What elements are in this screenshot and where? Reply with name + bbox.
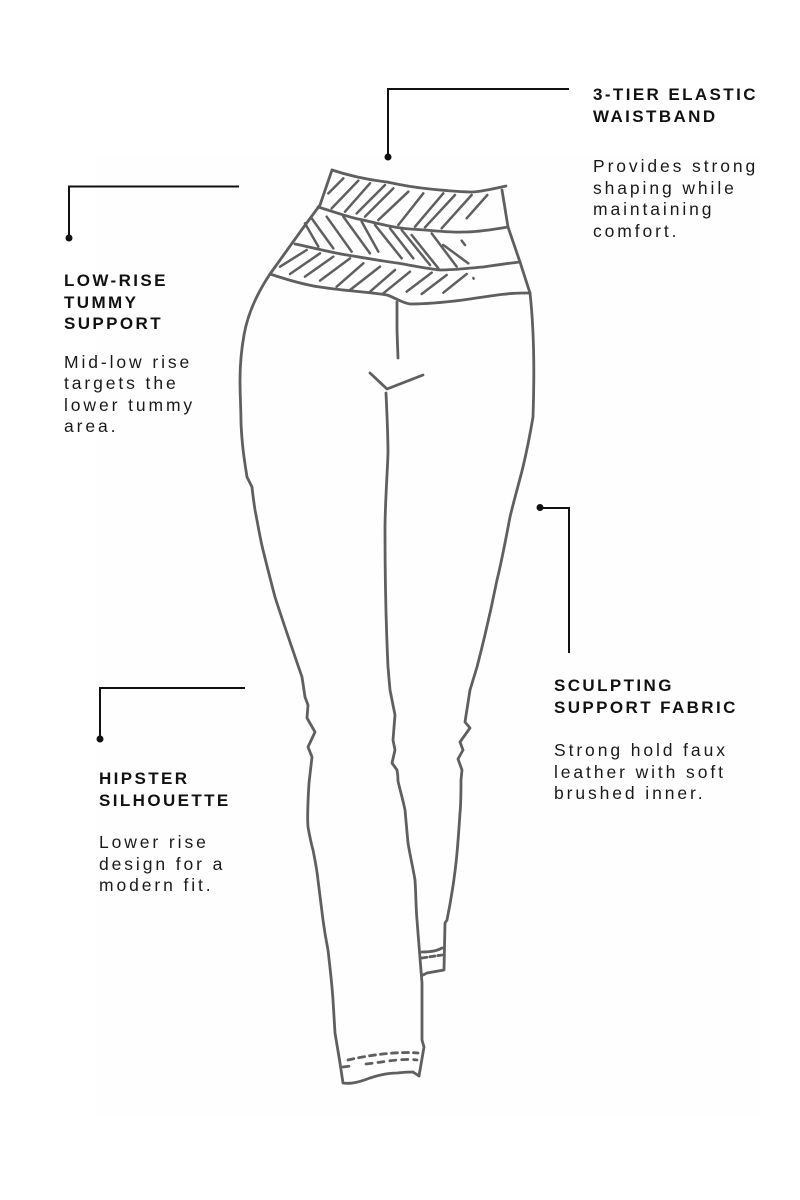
description: leather with soft bbox=[554, 762, 726, 782]
heading bbox=[593, 85, 758, 126]
heading bbox=[99, 769, 231, 810]
description: comfort. bbox=[593, 220, 679, 240]
callout text: hipster silhouette bbox=[99, 769, 231, 895]
back leg cuff stitching bbox=[422, 948, 442, 958]
heading: TUMMY bbox=[64, 292, 138, 312]
heading: SILHOUETTE bbox=[99, 790, 231, 810]
left outer leg bbox=[240, 274, 419, 1083]
heading: 3-TIER ELASTIC bbox=[593, 85, 758, 104]
description: area. bbox=[64, 416, 118, 436]
heading bbox=[64, 271, 168, 333]
description: Provides strong bbox=[593, 156, 758, 176]
description: modern fit. bbox=[99, 875, 214, 895]
description: Mid-low rise bbox=[64, 352, 192, 372]
description: Lower rise bbox=[99, 832, 209, 852]
waistband hatching bbox=[280, 178, 487, 294]
description: targets the bbox=[64, 373, 179, 393]
description bbox=[554, 740, 728, 803]
description: brushed inner. bbox=[554, 783, 706, 803]
heading: HIPSTER bbox=[99, 769, 189, 788]
callout text: low-rise tummy support bbox=[64, 271, 195, 436]
description: design for a bbox=[99, 854, 225, 874]
front seam and crotch bbox=[370, 302, 423, 389]
heading: SCULPTING bbox=[554, 676, 674, 695]
right outer leg bbox=[423, 293, 534, 975]
callout text: 3-tier elastic waistband bbox=[593, 85, 758, 240]
front cuff stitching bbox=[343, 1053, 418, 1067]
description: Strong hold faux bbox=[554, 740, 728, 760]
inseam bbox=[385, 393, 424, 1076]
heading: SUPPORT bbox=[64, 314, 163, 333]
description: lower tummy bbox=[64, 394, 195, 414]
description: shaping while bbox=[593, 178, 737, 198]
callout text: sculpting support fabric bbox=[554, 676, 738, 803]
description bbox=[593, 156, 758, 240]
description bbox=[99, 832, 225, 895]
heading: WAISTBAND bbox=[593, 106, 718, 126]
description: maintaining bbox=[593, 199, 714, 219]
waistband outline bbox=[270, 170, 530, 304]
heading: SUPPORT FABRIC bbox=[554, 698, 738, 716]
description bbox=[64, 352, 195, 436]
heading bbox=[554, 676, 738, 716]
heading: LOW-RISE bbox=[64, 271, 168, 290]
